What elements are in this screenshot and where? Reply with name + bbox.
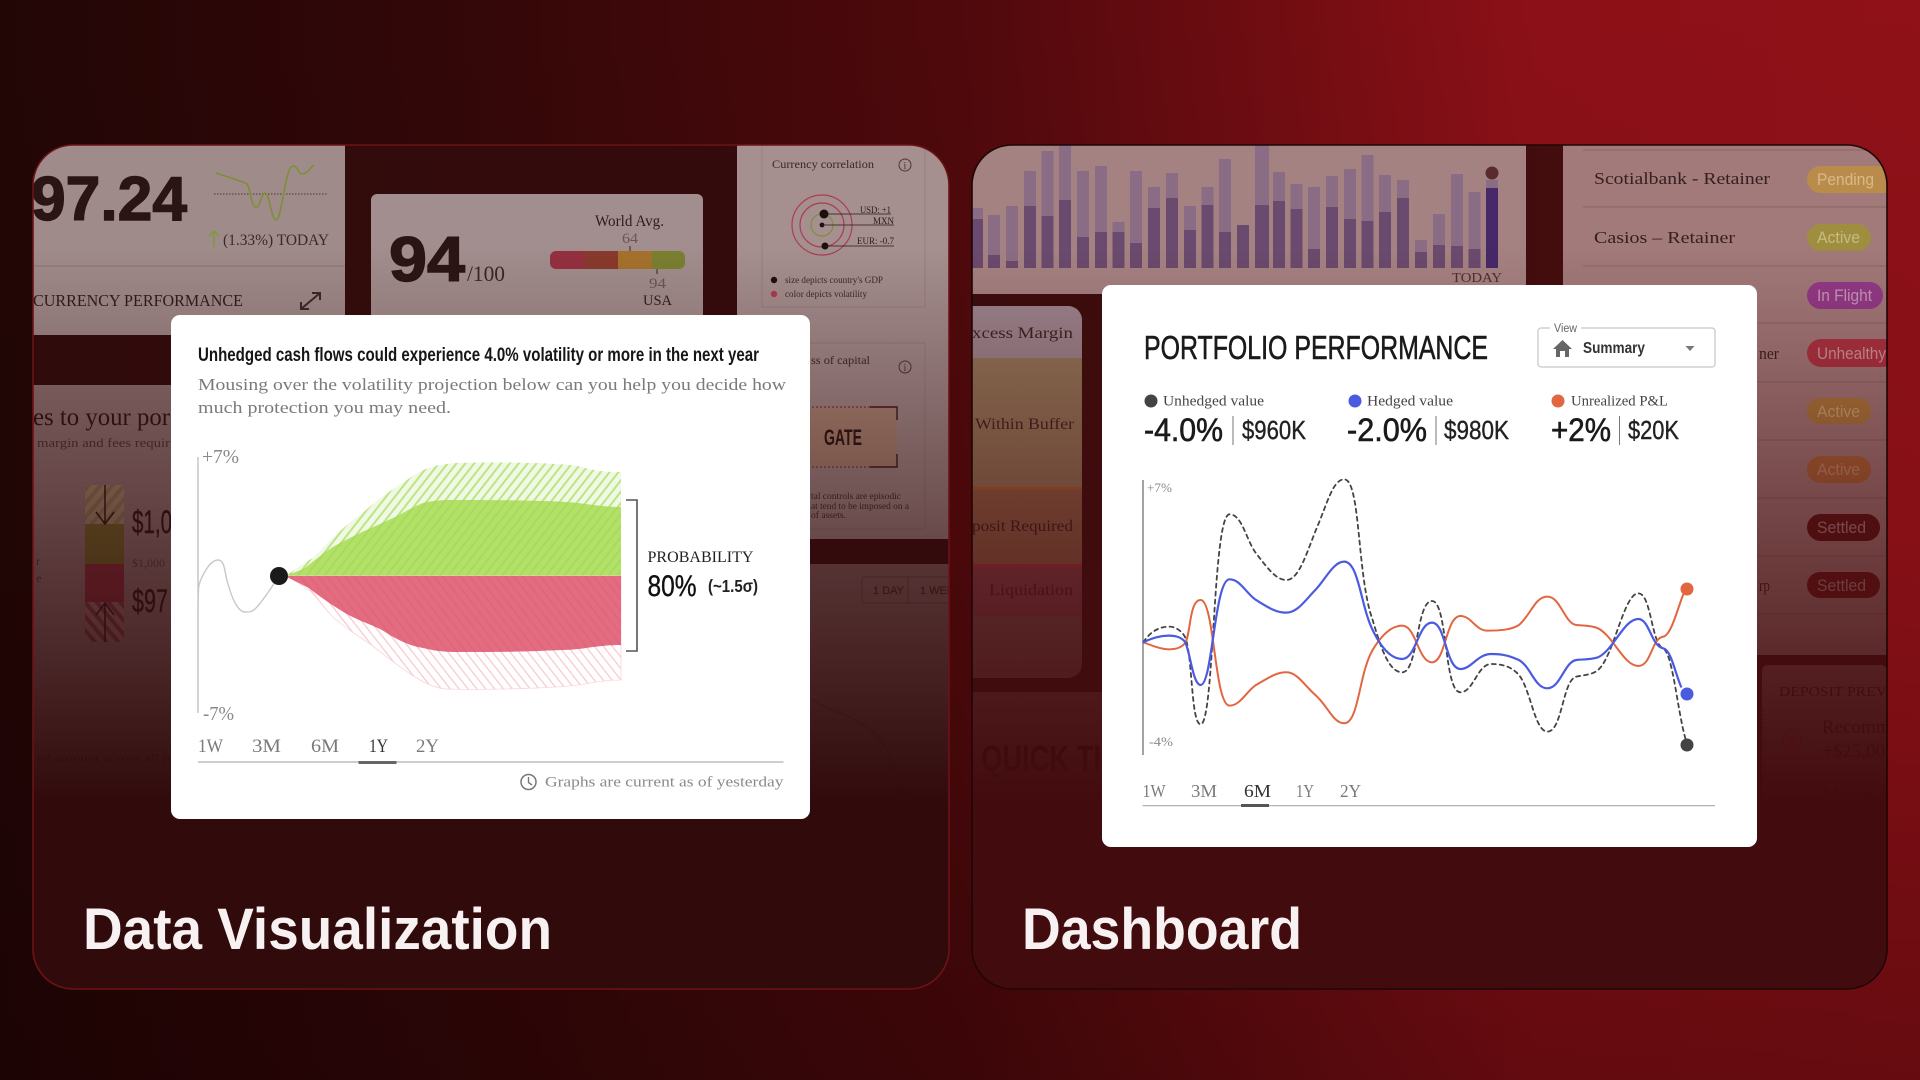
card: time range chart behind modal [810, 564, 948, 756]
list card: engagements and status pills [1563, 145, 1897, 655]
view dropdown [1538, 323, 1715, 367]
bar chart card: TODAY [1452, 271, 1502, 286]
list card: engagements and status pills: Casios – Retainer [1594, 228, 1735, 247]
card: margin and fees: $1,000 [132, 556, 165, 570]
card: currency correlation and capital gate: i [904, 161, 906, 172]
fade overlay [34, 280, 948, 864]
margin status stack: Within Buffer [975, 416, 1075, 433]
legend and values: unrealized [1551, 394, 1680, 448]
time range tabs: 2Y [416, 736, 439, 757]
time range tabs: 6M [1244, 781, 1271, 801]
status: active [1807, 398, 1871, 424]
legend and values: unrealized: +2% [1551, 412, 1611, 448]
time range tabs: 3M [252, 736, 281, 757]
time range tabs: 1W [1142, 781, 1166, 801]
status: active [1807, 456, 1871, 483]
quick tip card [973, 692, 1102, 732]
volatility fan chart: (~1.5σ) [708, 576, 758, 596]
card: margin and fees [34, 385, 171, 760]
panel title: data visualization: Data Visualization [83, 897, 552, 962]
modal description: much protection you may need. [198, 398, 451, 417]
legend and values: unrealized: $20K [1628, 415, 1680, 445]
time range tabs [198, 736, 784, 764]
line chart [1143, 479, 1694, 755]
status: settled: Settled [1817, 518, 1866, 537]
legend and values: unhedged: Unhedged value [1163, 394, 1264, 410]
card: currency correlation and capital gate: MXN [873, 217, 894, 227]
legend and values: unhedged [1144, 394, 1307, 448]
status: pending [1807, 166, 1886, 193]
time range tabs: 1W [198, 736, 223, 757]
legend and values: unhedged: $960K [1242, 415, 1307, 445]
card: time range chart behind modal: 1 DAY [873, 585, 905, 597]
card: time range chart behind modal: 1 WEEK [920, 585, 962, 597]
time range tabs: 6M [311, 736, 339, 757]
card: margin and fees: es to your por [33, 404, 171, 431]
card: currency correlation and capital gate: at tend to be imposed on a [811, 501, 909, 511]
time range tabs [1142, 781, 1715, 807]
panel: dashboard [960, 145, 1897, 989]
card: margin and fees: $97 [132, 583, 168, 619]
card: world average score [371, 194, 703, 315]
card: currency correlation and capital gate: i [904, 363, 906, 374]
modal: portfolio performance [1102, 285, 1757, 847]
card: margin and fees: ed amount across all p [37, 751, 170, 765]
status: settled [1807, 572, 1880, 598]
card: currency correlation and capital gate: size depicts country's GDP [785, 275, 883, 285]
status: unhealthy: Unhealthy [1817, 344, 1886, 363]
legend and values: unhedged: -4.0% [1144, 412, 1223, 448]
card: currency correlation and capital gate: Currency correlation [772, 159, 874, 171]
panel: data visualization [31, 145, 962, 989]
time range tabs: 2Y [1340, 781, 1361, 801]
card: world average score: USA [643, 293, 672, 309]
margin status stack: posit Required [972, 518, 1073, 535]
card: currency correlation and capital gate [737, 145, 949, 539]
time range tabs: 3M [1191, 781, 1217, 801]
margin status stack: xcess Margin [972, 325, 1073, 342]
modal heading: PORTFOLIO PERFORMANCE [1144, 329, 1488, 366]
card: world average score: 94 [649, 276, 667, 292]
card: world average score: /100 [467, 261, 505, 286]
bar chart card [972, 145, 1526, 294]
card: world average score: 94 [389, 225, 465, 295]
status: in flight: In Flight [1817, 286, 1872, 305]
view dropdown: View [1554, 323, 1578, 335]
volatility fan chart [198, 446, 758, 725]
modal: volatility projection [171, 315, 810, 819]
status: active: Active [1817, 402, 1860, 421]
card: currency correlation and capital gate: color depicts volatility [785, 289, 868, 299]
card: currency correlation and capital gate: tal controls are episodic [811, 491, 901, 501]
legend and values: hedged: Hedged value [1367, 394, 1453, 410]
margin status stack [972, 306, 1082, 678]
time range tabs: 1Y [1296, 781, 1314, 801]
status: unhealthy [1807, 339, 1886, 367]
card: currency correlation and capital gate: ss of capital [811, 355, 870, 367]
fade overlay [972, 283, 1886, 872]
list card: engagements and status pills: Scotialbank - Retainer [1594, 169, 1770, 188]
card: currency correlation and capital gate: EUR: -0.7 [857, 237, 894, 247]
card: margin and fees: e [36, 571, 41, 585]
legend and values: hedged: $980K [1444, 415, 1510, 445]
card: world average score: World Avg. [595, 213, 664, 230]
card: margin and fees: margin and fees requir [37, 435, 171, 450]
deposit preview card: Minim [1822, 785, 1874, 806]
card: margin and fees: r [36, 554, 40, 568]
panel title: dashboard: Dashboard [1022, 897, 1302, 962]
card: currency performance: 97.24 [31, 165, 188, 234]
status: settled [1807, 514, 1880, 541]
card: currency correlation and capital gate: of assets. [811, 510, 846, 520]
line chart: -4% [1149, 735, 1173, 749]
card: currency correlation and capital gate: USD: +1 [860, 206, 891, 216]
quick tip card: QUICK TI [981, 738, 1101, 779]
modal description [198, 375, 787, 417]
card: currency correlation and capital gate: GATE [824, 425, 862, 450]
deposit preview card: Recomm [1822, 717, 1891, 738]
volatility fan chart: PROBABILITY [648, 549, 754, 566]
status: active [1807, 224, 1871, 251]
list card: engagements and status pills: rp [1759, 576, 1770, 595]
modal description: Mousing over the volatility projection below can you help you decide how [198, 375, 787, 394]
status: settled: Settled [1817, 576, 1866, 595]
legend and values: hedged: -2.0% [1347, 412, 1427, 448]
view dropdown: Summary [1583, 340, 1645, 357]
legend and values: hedged [1347, 394, 1510, 448]
volatility fan chart: +7% [202, 446, 239, 468]
margin status stack: Liquidation [989, 582, 1073, 599]
card: currency performance [31, 145, 345, 335]
status: active: Active [1817, 228, 1860, 247]
legend and values: unrealized: Unrealized P&L [1571, 394, 1668, 410]
card: currency performance: CURRENCY PERFORMANCE [33, 291, 243, 310]
data freshness note: Graphs are current as of yesterday [545, 774, 784, 790]
status: active: Active [1817, 460, 1860, 479]
status: in flight [1807, 282, 1883, 309]
line chart: +7% [1147, 481, 1172, 495]
volatility fan chart: 80% [648, 570, 696, 603]
deposit preview card [1762, 665, 1886, 750]
card: world average score: 64 [622, 231, 639, 247]
card: margin and fees: $1,0 [132, 504, 172, 540]
status: pending: Pending [1817, 170, 1874, 189]
volatility fan chart: -7% [203, 703, 234, 725]
deposit preview card: DEPOSIT PREV [1779, 685, 1887, 700]
list card: engagements and status pills: ner [1759, 344, 1779, 363]
modal heading: Unhedged cash flows could experience 4.0% volatility or more in the next year [198, 345, 759, 366]
card: currency performance: (1.33%) TODAY [223, 232, 329, 249]
time range tabs: 1Y [369, 736, 388, 757]
deposit preview card: +$25,00 [1822, 741, 1885, 762]
